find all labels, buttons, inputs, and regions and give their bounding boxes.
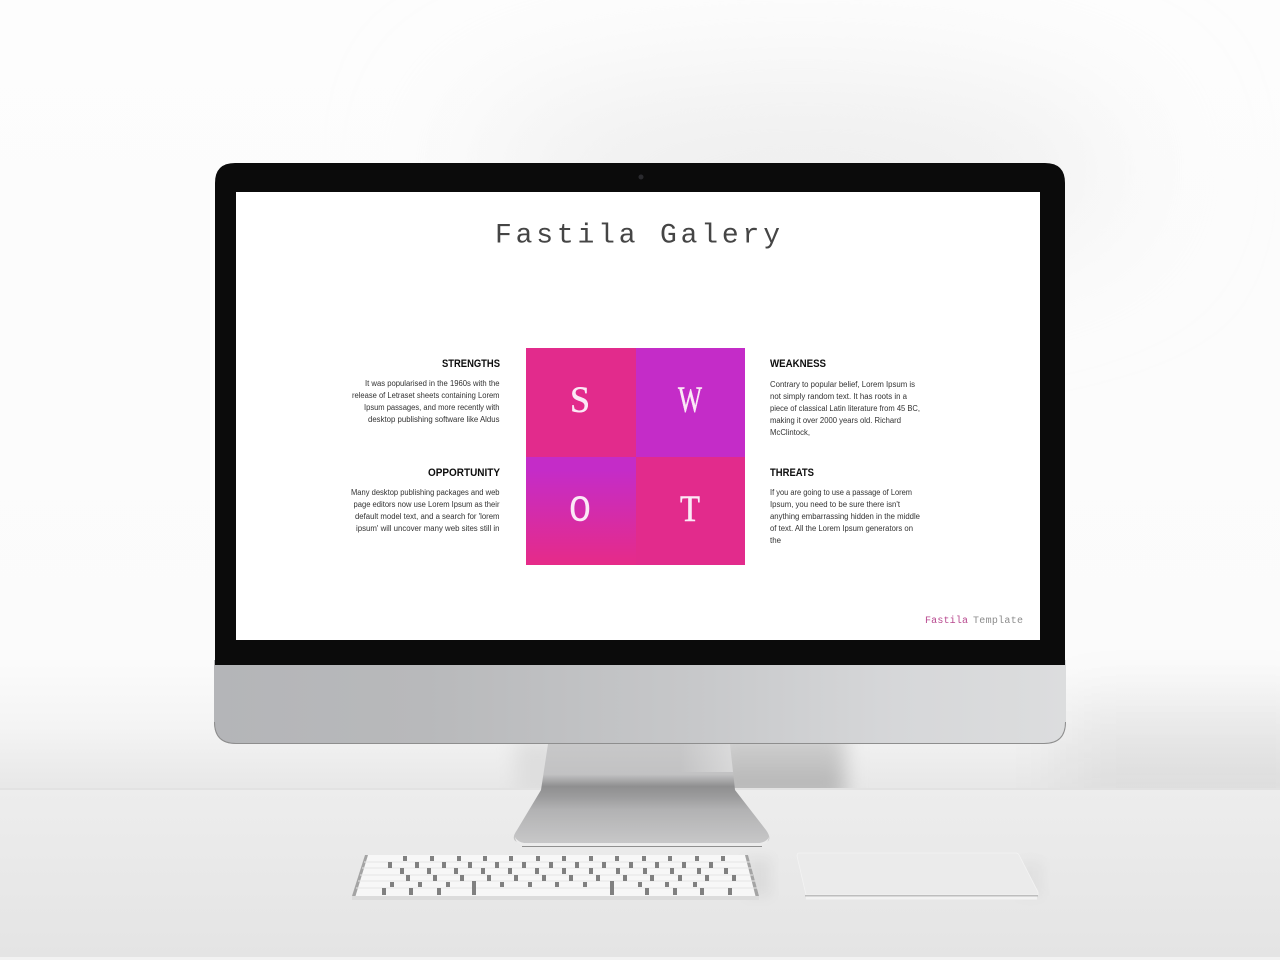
text block: opportunity: default model text, and a search for 'lorem	[355, 512, 500, 521]
keyboard	[352, 855, 771, 900]
webcam	[638, 174, 644, 180]
text block: threats	[770, 467, 920, 545]
cell: S: S	[570, 380, 590, 421]
text block: weakness	[770, 358, 920, 437]
text block: opportunity	[351, 467, 501, 533]
text block: opportunity: ipsum' will uncover many web sites still in	[356, 524, 500, 533]
text block: strengths: Ipsum passages, and more recently with	[364, 403, 500, 412]
monitor bezel	[215, 163, 1065, 665]
cell: O	[526, 457, 636, 565]
text block: threats: If you are going to use a passage of Lorem	[770, 488, 912, 497]
title: Fastila Galery	[495, 220, 780, 252]
text block: strengths: release of Letraset sheets containing Lorem	[352, 391, 500, 400]
cell: T	[636, 457, 745, 565]
trackpad	[797, 853, 1042, 900]
text block: opportunity: OPPORTUNITY	[428, 467, 501, 479]
cell: O: O	[569, 491, 591, 533]
text block: strengths	[352, 358, 500, 424]
text block: threats: THREATS	[770, 467, 814, 479]
text block: opportunity: page editors now use Lorem Ipsum as their	[354, 500, 500, 509]
cell: W	[636, 348, 745, 457]
text block: weakness: not simply random text. It has roots in a	[770, 392, 908, 401]
text block: threats: anything embarrassing hidden in the middle	[770, 512, 920, 521]
text block: strengths: STRENGTHS	[442, 358, 500, 370]
monitor stand	[514, 744, 769, 846]
text block: weakness: Contrary to popular belief, Lorem Ipsum is	[770, 380, 915, 389]
swot matrix	[526, 348, 745, 565]
monitor	[214, 163, 1066, 744]
cell: W: W	[678, 380, 702, 421]
footer brand text: Template	[973, 615, 1023, 627]
cell: S	[526, 348, 636, 457]
monitor chin	[214, 660, 1066, 744]
cell: T: T	[680, 489, 700, 530]
text block: weakness: piece of classical Latin literature from 45 BC,	[770, 404, 920, 413]
text block: strengths: It was popularised in the 1960s with the	[365, 379, 500, 388]
footer brand text: Fastila	[925, 615, 968, 627]
text block: weakness: making it over 2000 years old. Richard	[770, 416, 901, 425]
text block: weakness: WEAKNESS	[770, 358, 826, 370]
text block: opportunity: Many desktop publishing packages and web	[351, 488, 500, 497]
footer brand text	[925, 615, 1023, 627]
text block: strengths: desktop publishing software like Aldus	[368, 415, 500, 424]
text block: threats: of text. All the Lorem Ipsum generators on	[770, 524, 913, 533]
screen	[236, 192, 1040, 640]
keyboard row lines	[356, 862, 757, 888]
text block: threats: Ipsum, you need to be sure there isn't	[770, 500, 901, 509]
keyboard keys	[382, 856, 736, 895]
text block: threats: the	[770, 536, 781, 545]
text block: weakness: McClintock,	[770, 428, 810, 437]
